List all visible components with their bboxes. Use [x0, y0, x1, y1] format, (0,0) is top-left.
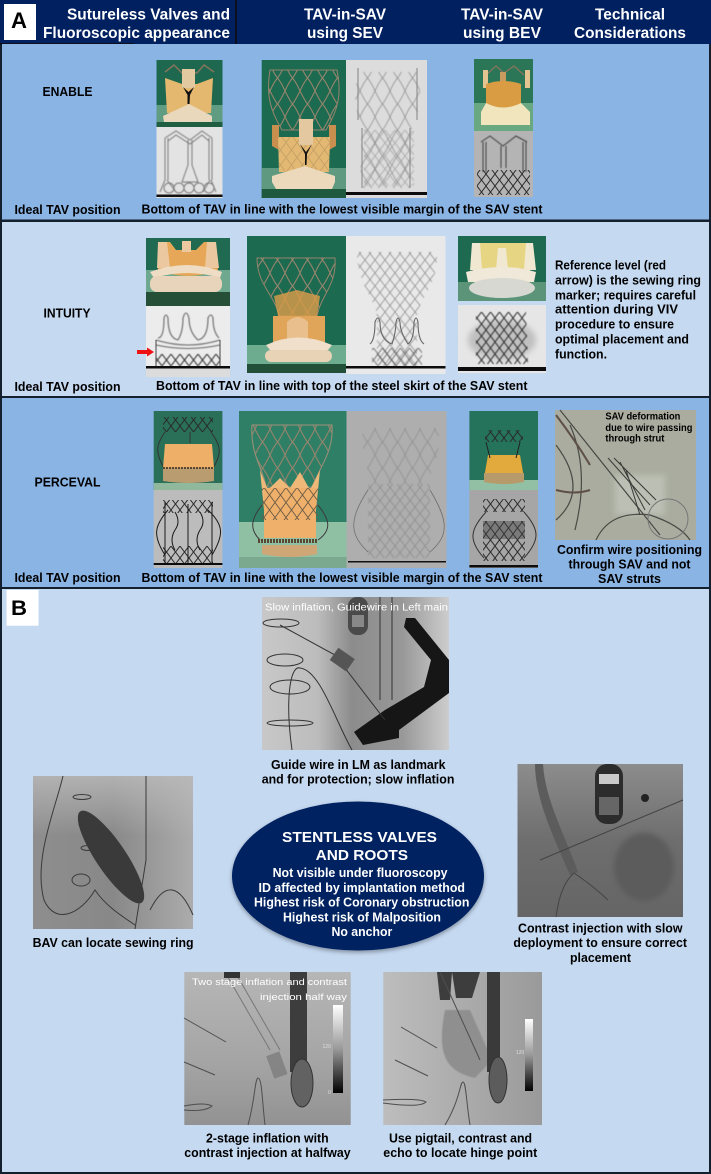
photo: INTUITY TAV-in-SAV SEV	[247, 236, 346, 373]
image caption: slow inflation: Slow inflation, Guidewire in Left main	[265, 602, 448, 614]
header: TAV-in-SAV using SEV	[304, 6, 386, 42]
header: TAV-in-SAV using BEV	[461, 6, 543, 42]
caption: PERCEVAL bottom of TAV: Bottom of TAV in line with the lowest visible margin of the SAV stent	[142, 571, 543, 585]
text: technical consideration for INTUITY: marker; requires careful	[555, 288, 696, 302]
panel: PERCEVAL	[2, 398, 709, 587]
caption: two stage inflation: 2-stage inflation with	[206, 1132, 329, 1146]
fluoroscopy: two stage inflation	[184, 972, 351, 1125]
x-ray: INTUITY valve	[146, 306, 230, 377]
x-ray: PERCEVAL TAV-in-SAV BEV	[469, 490, 538, 568]
photo: ENABLE TAV-in-SAV SEV	[262, 60, 346, 198]
text: technical consideration for INTUITY: optimal placement and	[555, 332, 689, 346]
photo: ENABLE valve	[156, 60, 222, 127]
caption: two stage inflation	[184, 1132, 351, 1160]
text: technical consideration for INTUITY: attention during VIV	[555, 302, 679, 316]
panel: INTUITY	[2, 222, 709, 396]
badge B: B	[11, 597, 27, 620]
text: SAV deformation note: through strut	[605, 434, 665, 444]
text: technical consideration for INTUITY: arrow) is the sewing ring	[555, 274, 701, 288]
header bar	[0, 0, 711, 45]
header: TAV-in-SAV using BEV: using BEV	[463, 25, 541, 42]
caption: ENABLE bottom of TAV: Bottom of TAV in line with the lowest visible margin of the SAV stent	[142, 202, 543, 216]
label: ideal TAV position: Ideal TAV position	[14, 203, 120, 217]
text: technical consideration for INTUITY: procedure to ensure	[555, 318, 674, 332]
fluoroscopy: BAV balloon	[33, 776, 193, 929]
label: ideal TAV position: Ideal TAV position	[14, 380, 120, 394]
caption: two stage inflation: contrast injection at halfway	[184, 1146, 351, 1160]
caption: guide wire	[262, 758, 454, 786]
caption: BAV: BAV can locate sewing ring	[33, 936, 194, 950]
x-ray: PERCEVAL valve	[154, 490, 222, 568]
text: confirm wire positioning	[557, 543, 702, 586]
callout: stentless valves and roots: Highest risk of Malposition	[283, 910, 441, 924]
image caption: two stage inflation	[192, 977, 347, 1003]
header: technical considerations	[574, 6, 686, 42]
badge A: A	[11, 8, 27, 33]
label: INTUITY: INTUITY	[44, 306, 91, 320]
fluoroscopy: contrast injection	[518, 764, 683, 917]
fluoroscopy: pigtail and hinge point: 120	[516, 1050, 525, 1056]
callout: stentless valves and roots: Not visible under fluoroscopy	[273, 866, 448, 880]
text: technical consideration for INTUITY	[555, 258, 701, 362]
label: ENABLE: ENABLE	[42, 85, 92, 99]
x-ray: ENABLE TAV-in-SAV SEV	[346, 60, 427, 198]
header: technical considerations: Considerations	[574, 25, 686, 42]
badge B	[6, 590, 38, 626]
header: TAV-in-SAV using BEV: TAV-in-SAV	[461, 6, 543, 24]
x-ray: INTUITY TAV-in-SAV SEV	[346, 236, 446, 374]
label: ideal TAV position: Ideal TAV position	[14, 571, 120, 585]
header: TAV-in-SAV using SEV: TAV-in-SAV	[304, 6, 386, 24]
text: technical consideration for INTUITY: function.	[555, 348, 607, 362]
caption: contrast injection: deployment to ensure correct	[513, 936, 688, 950]
callout: stentless valves and roots: AND ROOTS	[316, 848, 408, 864]
panel: ENABLE	[2, 44, 709, 220]
caption: pigtail	[383, 1132, 538, 1160]
text: confirm wire positioning: Confirm wire positioning	[557, 543, 702, 557]
photo: ENABLE TAV-in-SAV BEV	[474, 59, 533, 131]
fluoroscopy: wire through strut	[555, 410, 696, 540]
badge A	[4, 4, 36, 40]
label: PERCEVAL: PERCEVAL	[34, 476, 101, 490]
callout: stentless valves and roots: STENTLESS VALVES	[282, 830, 437, 846]
x-ray: PERCEVAL TAV-in-SAV SEV	[346, 411, 446, 568]
header: sutureless valves	[43, 6, 230, 42]
photo: INTUITY valve	[146, 238, 230, 306]
text: SAV deformation note: SAV deformation	[605, 412, 680, 422]
caption: guide wire: and for protection; slow inflation	[262, 772, 454, 786]
text: SAV deformation note: due to wire passing	[605, 423, 692, 434]
header: sutureless valves: Sutureless Valves and	[67, 6, 230, 24]
image caption: two stage inflation: injection half way	[260, 992, 347, 1003]
callout: stentless valves and roots: Highest risk of Coronary obstruction	[254, 896, 469, 910]
photo: INTUITY TAV-in-SAV BEV	[458, 236, 546, 301]
x-ray: ENABLE valve	[156, 127, 222, 198]
text: confirm wire positioning: through SAV and not	[568, 558, 691, 572]
caption: contrast injection: Contrast injection with slow	[518, 922, 683, 936]
photo: PERCEVAL TAV-in-SAV BEV	[469, 411, 538, 490]
caption: guide wire: Guide wire in LM as landmark	[271, 758, 446, 772]
header: TAV-in-SAV using SEV: using SEV	[307, 25, 383, 42]
x-ray: ENABLE TAV-in-SAV BEV	[474, 131, 533, 197]
header: technical considerations: Technical	[595, 6, 665, 24]
callout: stentless valves and roots: ID affected by implantation method	[258, 881, 465, 895]
callout: stentless valves and roots	[232, 802, 484, 950]
callout: stentless valves and roots: No anchor	[332, 925, 392, 939]
fluoroscopy: pigtail and hinge point	[383, 972, 542, 1125]
text: confirm wire positioning: SAV struts	[598, 572, 661, 586]
photo: PERCEVAL valve	[154, 411, 222, 490]
caption: INTUITY bottom of TAV: Bottom of TAV in line with top of the steel skirt of the SAV stent	[156, 379, 528, 393]
fluoroscopy: two stage inflation: 0	[328, 1090, 331, 1096]
panel B: stentless valves and roots	[2, 589, 709, 1172]
x-ray: INTUITY TAV-in-SAV BEV	[458, 305, 546, 373]
photo: PERCEVAL TAV-in-SAV SEV	[239, 411, 346, 568]
text: SAV deformation note	[605, 412, 692, 444]
caption: pigtail: Use pigtail, contrast and	[389, 1132, 532, 1146]
arrow: red reference level	[137, 348, 154, 356]
caption: pigtail: echo to locate hinge point	[383, 1146, 538, 1160]
caption: contrast injection	[513, 922, 688, 965]
image caption: two stage inflation: Two stage inflation and contrast	[192, 977, 347, 988]
caption: contrast injection: placement	[570, 951, 632, 965]
fluoroscopy: two stage inflation: 120	[322, 1044, 331, 1050]
fluoroscopy: guide wire in left main	[262, 597, 449, 750]
header: sutureless valves: Fluoroscopic appearance	[43, 25, 230, 42]
text: technical consideration for INTUITY: Reference level (red	[555, 258, 666, 272]
